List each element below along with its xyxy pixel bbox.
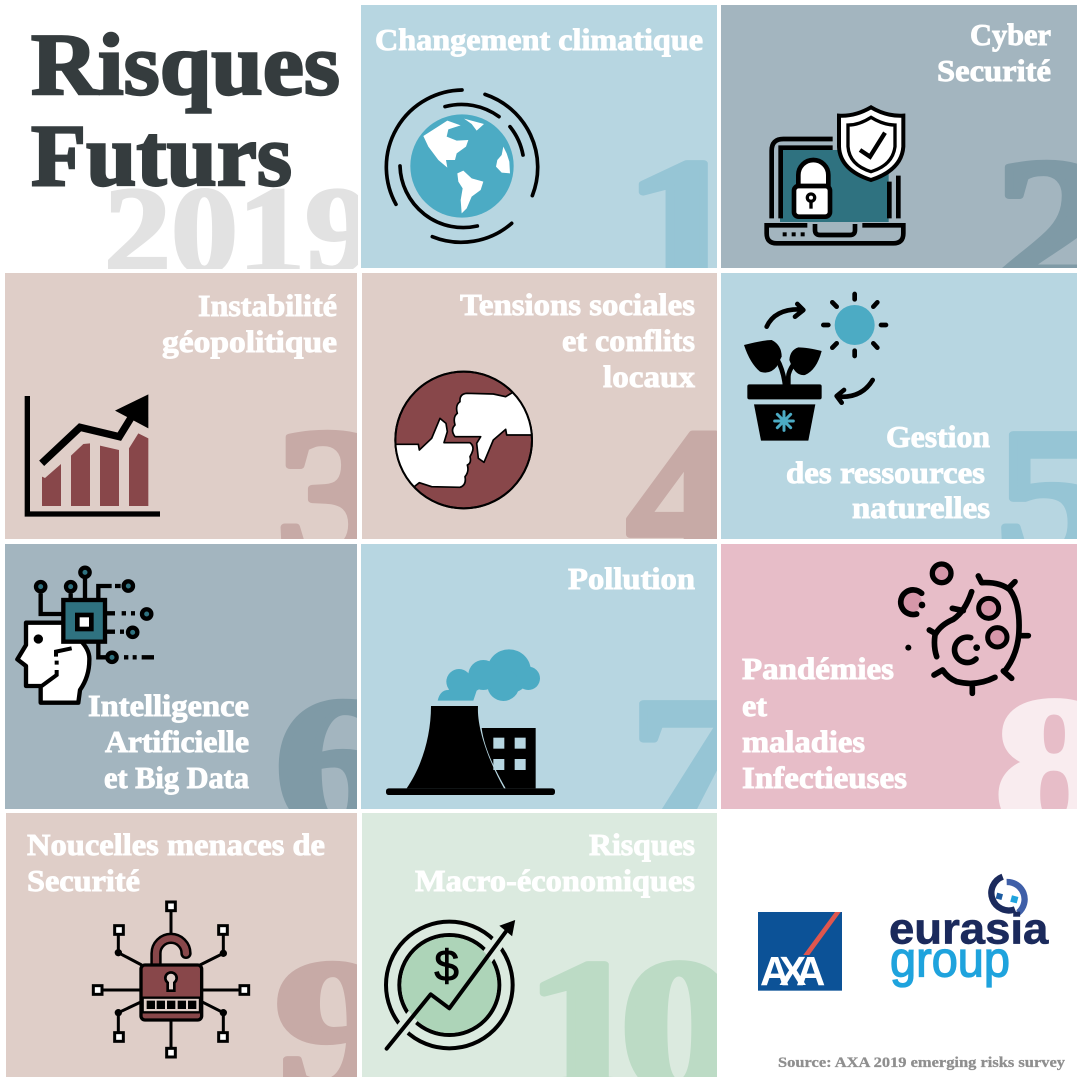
logo: Eurasia Group: eurasia (889, 905, 1049, 953)
heading: Macro-économiques (415, 863, 695, 898)
panel 2: Cyber Securité (721, 5, 1077, 268)
heading: Instabilité (198, 288, 337, 323)
heading: Noucelles menaces de (27, 827, 325, 862)
logo: Eurasia Group: group (890, 932, 1010, 988)
panel 5: Gestion des ressources naturelles (721, 273, 1077, 539)
number 6: 6 (275, 658, 394, 870)
heading (27, 827, 325, 898)
icon: virus (900, 564, 1028, 693)
heading: Infectieuses (742, 760, 907, 795)
heading: Gestion (886, 419, 990, 454)
panel 6: Intelligence Artificielle et Big Data (5, 544, 357, 809)
heading (460, 287, 696, 394)
heading: Artificielle (105, 724, 249, 759)
heading: Pollution (568, 561, 695, 596)
heading: locaux (603, 359, 696, 394)
panel 1: Changement climatique (361, 5, 717, 268)
heading: Intelligence (88, 688, 249, 723)
logo: Eurasia Group (889, 877, 1049, 988)
logo: AXA: AXA (760, 948, 825, 994)
source note: Source: AXA 2019 emerging risks survey (778, 1055, 1066, 1071)
logo: AXA (758, 912, 842, 994)
icon: globe (386, 90, 538, 242)
heading (415, 827, 695, 898)
year watermark: 2019 (104, 162, 372, 299)
heading: Cyber (970, 17, 1051, 52)
heading: Securité (937, 53, 1051, 88)
heading: Risques (589, 827, 695, 862)
heading: Changement climatique (375, 22, 703, 57)
panel 7: Pollution (361, 544, 717, 809)
heading: et (742, 688, 768, 723)
heading (162, 288, 337, 359)
icon: open padlock network (93, 902, 249, 1057)
panel 9: Noucelles menaces de Securité (6, 813, 357, 1077)
number 1: 1 (624, 119, 743, 331)
icon: laptop with lock and shield (767, 107, 903, 243)
heading: Pandémies (742, 651, 894, 686)
panel 3: Instabilité géopolitique (5, 273, 357, 539)
icon: thumbs up and down (390, 372, 537, 508)
panel 4: Tensions sociales et conflits locaux (362, 273, 717, 539)
icon: dollar coin with rising arrow (380, 921, 514, 1057)
heading: des ressources (786, 455, 985, 490)
heading (937, 17, 1051, 88)
icon: AI head with chip (17, 568, 154, 703)
heading (786, 419, 990, 525)
heading (88, 688, 249, 795)
title: Futurs: Futurs (31, 108, 292, 205)
panel 10: Risques Macro-économiques (362, 813, 730, 1080)
heading: maladies (742, 724, 865, 759)
heading (742, 651, 907, 795)
number 7: 7 (630, 658, 749, 870)
heading: et Big Data (104, 760, 249, 795)
icon: factory with smoke (386, 649, 555, 795)
icon: rising bar chart (27, 394, 160, 514)
heading: et conflits (562, 323, 695, 358)
number 4: 4 (627, 389, 733, 600)
panel 8: Pandémies et maladies Infectieuses (721, 544, 1077, 809)
heading: Tensions sociales (460, 287, 695, 322)
title: Risques: Risques (31, 17, 340, 114)
icon: dollar coin with rising arrow: $ (434, 942, 459, 991)
heading: naturelles (852, 490, 990, 525)
icon: plant and sun cycle (744, 294, 886, 441)
title block (31, 32, 358, 269)
number 3: 3 (276, 389, 395, 601)
heading: géopolitique (162, 324, 337, 359)
logos (758, 877, 1049, 994)
heading: Securité (27, 863, 140, 898)
